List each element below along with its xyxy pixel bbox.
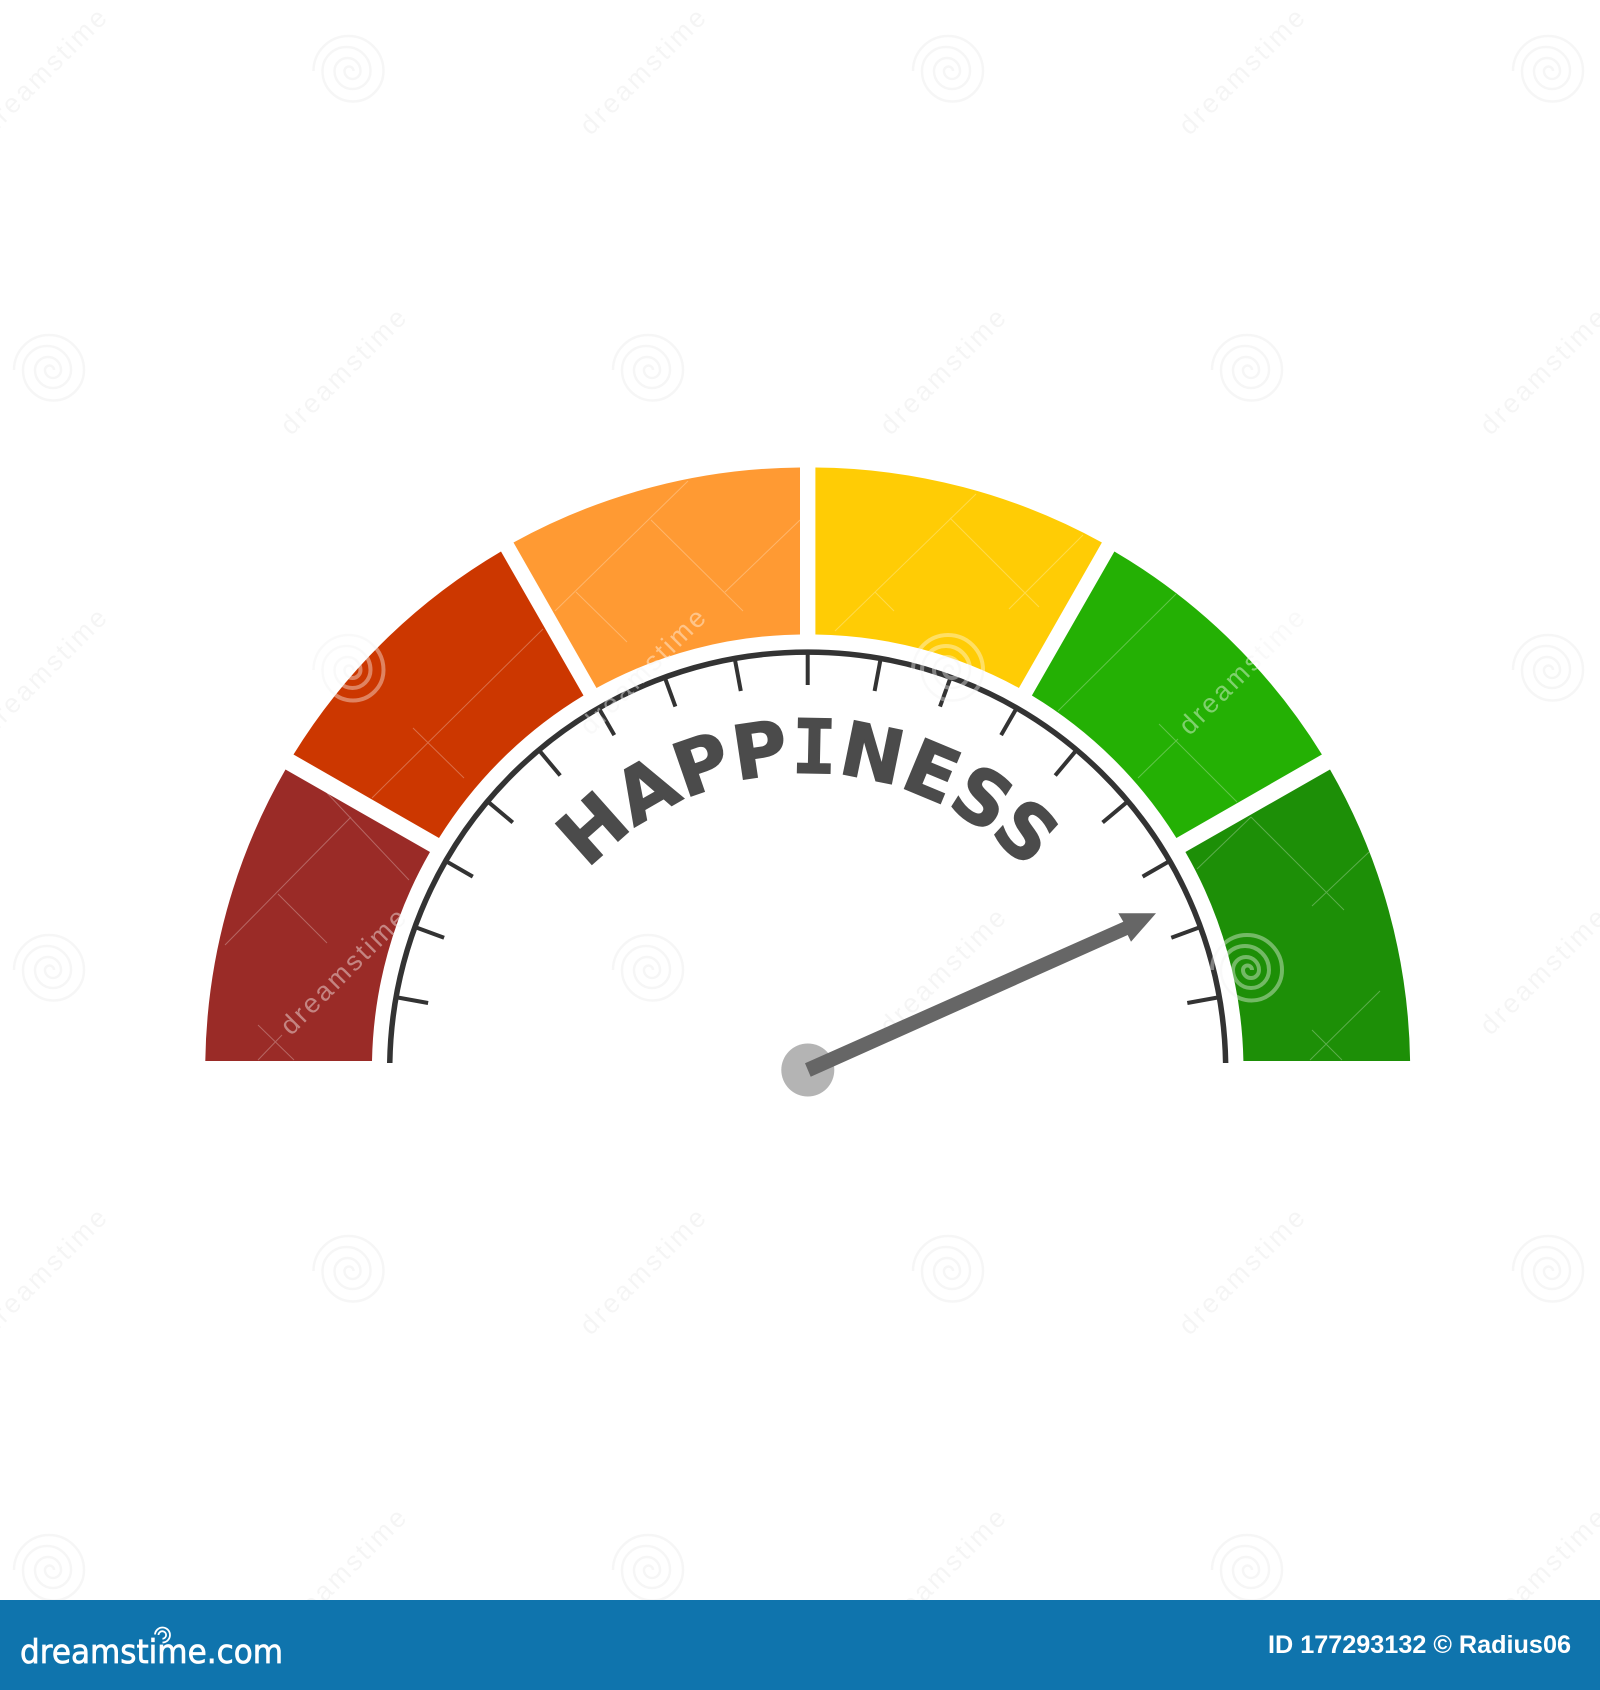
faint watermark pattern: dreamstime bbox=[1173, 1203, 1311, 1341]
band: orange bbox=[514, 468, 800, 688]
white watermark over gauge: dreamstime bbox=[1173, 603, 1311, 741]
faint watermark pattern: dreamstime bbox=[274, 903, 412, 1041]
needle hub bbox=[781, 1044, 834, 1096]
needle arrow bbox=[805, 913, 1156, 1077]
faint watermark pattern: dreamstime bbox=[574, 3, 712, 141]
faint watermark pattern: dreamstime bbox=[274, 303, 412, 441]
curved title: HAPPINESS: HAPPINESS bbox=[554, 718, 1058, 866]
faint watermark pattern: dreamstime bbox=[874, 1503, 1012, 1641]
gauge colour bands bbox=[205, 468, 1410, 1061]
footer bar bbox=[0, 1600, 1600, 1690]
faint watermark pattern: dreamstime bbox=[874, 303, 1012, 441]
white watermark over gauge: dreamstime bbox=[274, 903, 412, 1041]
band: dark green bbox=[1185, 770, 1410, 1061]
faint watermark pattern: dreamstime bbox=[274, 1503, 412, 1641]
scale arc with tick marks bbox=[390, 652, 1226, 1063]
faint watermark pattern: dreamstime bbox=[1173, 3, 1311, 141]
faint watermark pattern: dreamstime bbox=[1173, 603, 1311, 741]
footer logo swirl bbox=[155, 1628, 170, 1642]
footer image credit: ID 177293132 © Radius06 bbox=[1268, 1631, 1571, 1659]
white watermark over gauge bbox=[225, 481, 1380, 1060]
band: dark red bbox=[205, 770, 430, 1061]
footer logo text: dreamstime.com bbox=[20, 1632, 283, 1671]
band: light green bbox=[1032, 552, 1322, 838]
faint watermark pattern: dreamstime bbox=[574, 1203, 712, 1341]
band: red bbox=[294, 552, 584, 838]
band: yellow bbox=[815, 468, 1102, 688]
faint watermark pattern: dreamstime bbox=[874, 903, 1012, 1041]
faint watermark pattern: dreamstime bbox=[574, 603, 712, 741]
white watermark over gauge: dreamstime bbox=[574, 603, 712, 741]
